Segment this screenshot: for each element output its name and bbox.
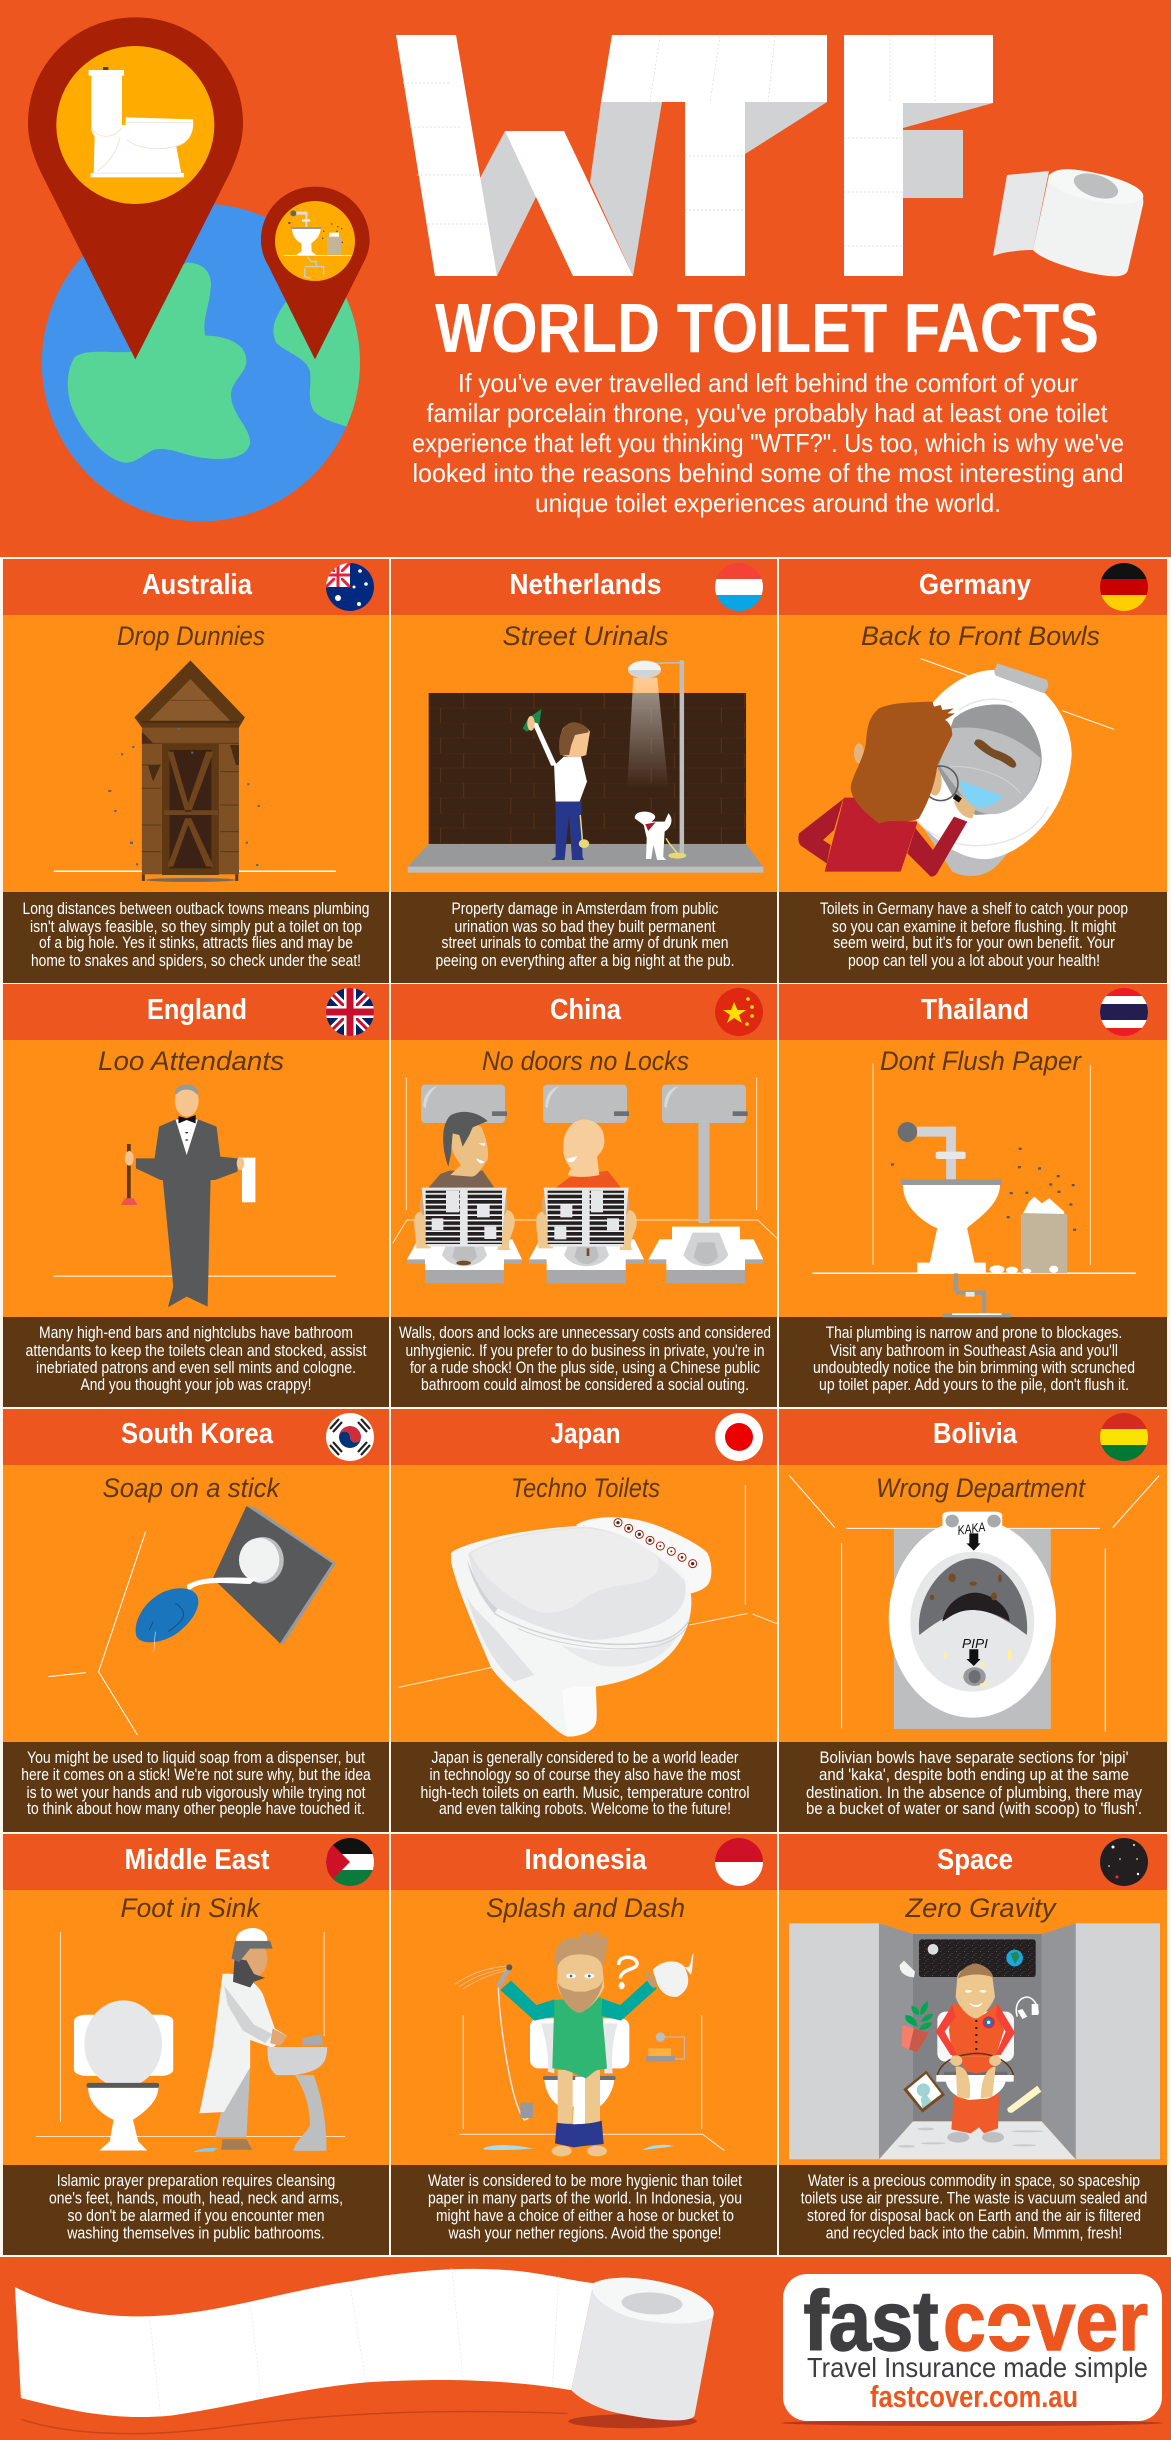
panel: Indonesia bbox=[391, 1834, 777, 2255]
subtitle: Foot in Sink bbox=[120, 1893, 261, 1923]
body text: high-tech toilets on earth. Music, temperature control bbox=[420, 1784, 750, 1802]
body text: washing themselves in public bathrooms. bbox=[66, 2224, 325, 2242]
illustration: two men on squat toilets with newspapers bbox=[393, 1078, 777, 1283]
body text bbox=[420, 1749, 750, 1818]
small pin with sink bbox=[261, 187, 370, 359]
panel: Germany bbox=[779, 559, 1167, 983]
body text: and 'kaka', despite both ending up at the same bbox=[819, 1766, 1129, 1784]
body text: bathroom could almost be considered a social outing. bbox=[421, 1376, 749, 1394]
illustration: sink and paper bin bbox=[813, 1063, 1136, 1317]
flag: Space bbox=[1100, 1838, 1148, 1886]
body text: urination was so bad they built permanent bbox=[454, 918, 716, 936]
body text: is to wet your hands and rub vigorously while trying not bbox=[26, 1784, 366, 1802]
squat toilets bbox=[407, 1227, 763, 1283]
intro text bbox=[412, 368, 1124, 518]
subtitle: No doors no Locks bbox=[482, 1046, 689, 1076]
fastcover logo card bbox=[781, 2274, 1163, 2426]
heading: Middle East: Middle East bbox=[124, 1844, 270, 1876]
body text: paper in many parts of the world. In Indonesia, you bbox=[428, 2190, 742, 2208]
heading: England: England bbox=[147, 994, 247, 1026]
label: PIPI: PIPI bbox=[962, 1636, 988, 1651]
WTF paper letters bbox=[396, 35, 993, 276]
panel: China bbox=[391, 984, 777, 1407]
body text bbox=[26, 1324, 367, 1394]
heading: South Korea: South Korea bbox=[121, 1418, 274, 1450]
body text: And you thought your job was crappy! bbox=[80, 1376, 312, 1394]
body text: poop can tell you a lot about your health! bbox=[848, 952, 1100, 970]
body text: Japan is generally considered to be a world leader bbox=[432, 1749, 739, 1767]
intro text: If you've ever travelled and left behind the comfort of your bbox=[458, 368, 1078, 398]
tagline: Travel Insurance made simple bbox=[807, 2352, 1148, 2383]
location pins bbox=[28, 17, 370, 359]
body text: be a bucket of water or sand (with scoop) to 'flush'. bbox=[806, 1800, 1142, 1818]
body text bbox=[806, 1749, 1143, 1818]
website: fastcover.com.au bbox=[870, 2379, 1078, 2414]
wordmark: fast bbox=[804, 2274, 938, 2368]
body text: inebriated patrons and even sell mints and cologne. bbox=[36, 1359, 356, 1377]
body text: attendants to keep the toilets clean and stocked, assist bbox=[26, 1342, 367, 1360]
body text: unhygienic. If you prefer to do business in private, you're in bbox=[406, 1342, 764, 1360]
body text: to think about how many other people have touched it. bbox=[27, 1800, 365, 1818]
heading: Germany: Germany bbox=[919, 569, 1031, 601]
body text: here it comes on a stick! We're not sure why, but the idea bbox=[21, 1766, 371, 1784]
wordmark bbox=[804, 2274, 1148, 2368]
flag: Indonesia bbox=[715, 1838, 763, 1886]
panel: South Korea bbox=[3, 1409, 389, 1832]
body text: so don't be alarmed if you encounter men bbox=[68, 2207, 324, 2225]
heading: China: China bbox=[550, 994, 622, 1026]
illustration: astronaut on zero gravity toilet bbox=[789, 1923, 1160, 2159]
subtitle: Soap on a stick bbox=[102, 1473, 281, 1503]
body text: isn't always feasible, so they simply put a toilet on top bbox=[30, 918, 362, 936]
panel: Bolivia bbox=[779, 1409, 1167, 1832]
man reading newspaper right bbox=[536, 1119, 637, 1250]
subtitle: Wrong Department bbox=[876, 1473, 1086, 1503]
flag: Netherlands bbox=[715, 563, 763, 611]
body text: street urinals to combat the army of drunk men bbox=[442, 934, 728, 952]
intro text: looked into the reasons behind some of the most interesting and bbox=[412, 458, 1124, 488]
heading: Indonesia: Indonesia bbox=[524, 1844, 647, 1876]
flag: England bbox=[326, 988, 374, 1036]
body text: peeing on everything after a big night at the pub. bbox=[436, 952, 734, 970]
heading: Netherlands: Netherlands bbox=[510, 569, 662, 601]
subtitle: Back to Front Bowls bbox=[861, 621, 1100, 651]
illustration: woman inspecting German bowl bbox=[798, 659, 1114, 877]
heading: Bolivia: Bolivia bbox=[933, 1418, 1018, 1450]
body text: Many high-end bars and nightclubs have bathroom bbox=[39, 1324, 353, 1342]
body text: one's feet, hands, mouth, head, neck and arms, bbox=[49, 2190, 343, 2208]
panel: Japan bbox=[391, 1409, 777, 1832]
illustration: outback drop toilet hut bbox=[54, 660, 336, 882]
body text bbox=[820, 900, 1128, 970]
illustration: confused man with hose and teapot bbox=[455, 1932, 724, 2156]
body text bbox=[813, 1324, 1135, 1394]
body text bbox=[428, 2172, 742, 2242]
body text: Thai plumbing is narrow and prone to blockages. bbox=[826, 1324, 1122, 1342]
flag: Germany bbox=[1100, 563, 1148, 611]
subtitle: Dont Flush Paper bbox=[880, 1046, 1082, 1076]
body text: of a big hole. Yes it stinks, attracts flies and may be bbox=[39, 934, 353, 952]
panel: Middle East bbox=[3, 1834, 389, 2255]
wordmark: cover bbox=[943, 2274, 1148, 2368]
intro text: unique toilet experiences around the world. bbox=[535, 488, 1001, 518]
man reading newspaper left bbox=[414, 1112, 515, 1250]
subtitle: Street Urinals bbox=[502, 621, 668, 651]
illustration: man washing foot at sink beside toilet bbox=[36, 1928, 345, 2152]
subtitle: Loo Attendants bbox=[98, 1046, 284, 1076]
big pin with toilet bbox=[28, 17, 243, 359]
flag: South Korea bbox=[326, 1413, 374, 1461]
heading: Australia: Australia bbox=[142, 569, 253, 601]
panel: Thailand bbox=[779, 984, 1167, 1407]
body text: Water is considered to be more hygienic than toilet bbox=[428, 2172, 742, 2190]
body text bbox=[21, 1749, 371, 1818]
flag: Thailand bbox=[1100, 988, 1148, 1036]
body text bbox=[399, 1324, 771, 1394]
heading: Thailand: Thailand bbox=[921, 994, 1029, 1026]
flag: Australia bbox=[326, 563, 374, 611]
footer toilet paper roll bbox=[15, 2268, 714, 2434]
body text: Property damage in Amsterdam from public bbox=[452, 900, 718, 918]
subtitle: Zero Gravity bbox=[904, 1893, 1057, 1923]
subtitle: Drop Dunnies bbox=[117, 621, 265, 651]
body text bbox=[22, 900, 370, 970]
body text: for a rude shock! On the plus side, using a Chinese public bbox=[410, 1359, 760, 1377]
body text: home to snakes and spiders, so check under the seat! bbox=[31, 952, 361, 970]
body text: in technology so of course they also have the most bbox=[430, 1766, 741, 1784]
illustration: high-tech wall toilet bbox=[398, 1485, 777, 1737]
panel: Netherlands bbox=[391, 559, 777, 983]
subtitle: Splash and Dash bbox=[486, 1893, 685, 1923]
subtitle: Techno Toilets bbox=[511, 1473, 660, 1503]
body text: You might be used to liquid soap from a dispenser, but bbox=[27, 1749, 365, 1767]
body text: might have a choice of either a hose or bucket to bbox=[436, 2207, 734, 2225]
flag: China bbox=[715, 988, 763, 1036]
illustration: tuxedo attendant with plunger and roll bbox=[54, 1085, 336, 1307]
body text: Bolivian bowls have separate sections for 'pipi' bbox=[820, 1749, 1128, 1767]
globe bbox=[42, 204, 373, 521]
body text: wash your nether regions. Avoid the sponge! bbox=[448, 2224, 722, 2242]
panel: England bbox=[3, 984, 389, 1407]
flag: Middle East bbox=[326, 1838, 374, 1886]
intro text: familar porcelain throne, you've probably had at least one toilet bbox=[426, 398, 1108, 428]
label: KAKA: KAKA bbox=[956, 1519, 986, 1538]
body text: and even talking robots. Welcome to the future! bbox=[439, 1800, 731, 1818]
panel: Australia bbox=[3, 559, 389, 983]
panel: Space bbox=[779, 1834, 1167, 2255]
body text bbox=[49, 2172, 343, 2242]
flag: Japan bbox=[715, 1413, 763, 1461]
body text bbox=[801, 2172, 1147, 2242]
body text: Walls, doors and locks are unnecessary costs and considered bbox=[399, 1324, 771, 1342]
illustration: soap on a stick bbox=[49, 1506, 336, 1735]
heading: Japan: Japan bbox=[550, 1418, 620, 1450]
flag: Bolivia bbox=[1100, 1413, 1148, 1461]
body text: and recycled back into the cabin. Mmmm, fresh! bbox=[826, 2224, 1122, 2242]
illustration: street urinal wall, man and dog bbox=[408, 660, 763, 873]
heading: Space: Space bbox=[937, 1844, 1013, 1876]
body text: Visit any bathroom in Southeast Asia and you'll bbox=[830, 1342, 1118, 1360]
illustration: Bolivian two-section bowl bbox=[789, 1476, 1159, 1732]
body text: Long distances between outback towns means plumbing bbox=[22, 900, 370, 918]
body text: seem weird, but it's for your own benefit. Your bbox=[833, 934, 1115, 952]
body text: Islamic prayer preparation requires cleansing bbox=[57, 2172, 335, 2190]
body text: so you can examine it before flushing. It might bbox=[832, 918, 1116, 936]
toilet roll top bbox=[993, 168, 1143, 276]
body text bbox=[436, 900, 734, 970]
body text: destination. In the absence of plumbing, there may bbox=[806, 1784, 1143, 1802]
